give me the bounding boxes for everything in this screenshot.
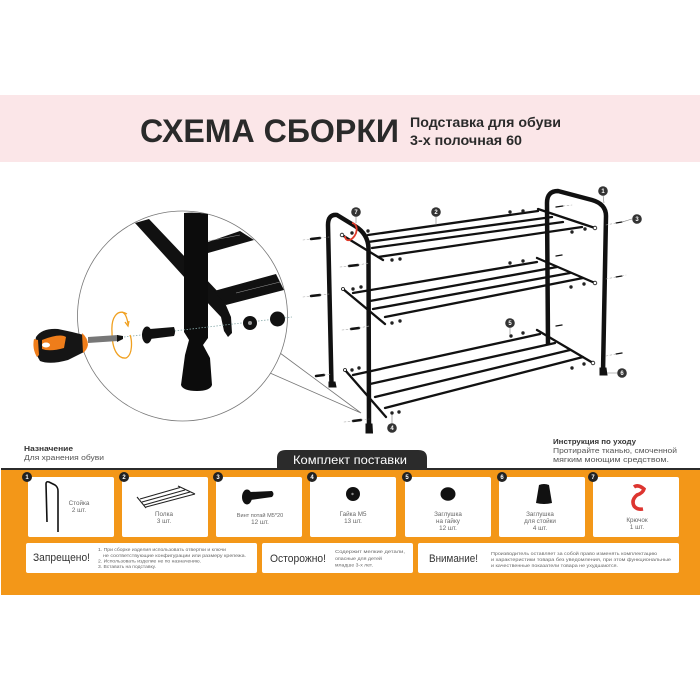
- card 6: post cap: для стойки: [524, 517, 556, 525]
- card 6: post cap: Заглушка: [526, 511, 554, 518]
- detail: cap nut: [270, 312, 285, 326]
- detail: nut: [243, 316, 257, 330]
- icon: red hook on rack: [345, 223, 357, 240]
- shoe rack assembly diagram: [303, 186, 642, 433]
- card 2: shelf: 2: [122, 475, 126, 481]
- card 3: screw: 3: [216, 475, 220, 481]
- rack number callouts: 5: [508, 321, 512, 327]
- purpose text: Назначение: [24, 446, 73, 453]
- card 4: nut: 4: [310, 475, 314, 481]
- rack number callouts: 1: [601, 189, 605, 195]
- note: attention: и характеристики товара без уведомления, при этом функциональные: [491, 557, 672, 562]
- orange kit panel: [1, 468, 700, 595]
- magnified detail callout: [33, 211, 361, 421]
- rack: rear uprights: [328, 191, 607, 433]
- title: СХЕМА СБОРКИ: [140, 113, 399, 149]
- card 4: nut: [307, 472, 396, 537]
- card 2: shelf: 3 шт.: [157, 518, 171, 525]
- card 4: nut: 13 шт.: [344, 518, 362, 525]
- card 3: screw: Винт потай М5*20: [237, 512, 283, 519]
- rack number callouts: 2: [434, 210, 438, 216]
- subtitle: 3-х полочная 60: [410, 133, 522, 148]
- note: forbidden: Запрещено!: [33, 552, 90, 564]
- rack number callouts: [351, 186, 642, 433]
- rack number callouts: 4: [390, 426, 394, 432]
- card 5: nut cap: [402, 472, 491, 537]
- rack: bottom shelf: [345, 330, 593, 417]
- card 1: upright: 2 шт.: [72, 507, 86, 514]
- rack: white bolt holes: [340, 226, 597, 372]
- rack: middle shelf: [343, 258, 595, 324]
- icon: rotation arrow: [112, 312, 131, 358]
- detail: shelf bars: [135, 219, 284, 337]
- note: caution: [262, 543, 413, 573]
- care instructions: Инструкция по уходу: [553, 437, 637, 446]
- care instructions: мягким моющим средством.: [553, 455, 669, 464]
- care instructions: Протирайте тканью, смоченной: [553, 446, 677, 455]
- rack: top shelf: [342, 209, 595, 260]
- subtitle: Подставка для обуви: [410, 115, 561, 130]
- rack number callouts: 6: [620, 371, 624, 377]
- detail: post and foot: [181, 213, 212, 391]
- card 3: screw: 12 шт.: [251, 519, 269, 526]
- note: caution: Содержит мелкие детали,: [335, 549, 405, 554]
- kit tab: [277, 450, 427, 469]
- card 2: shelf: Полка: [155, 511, 173, 518]
- card 6: post cap: 6: [500, 475, 504, 481]
- subtitle: [410, 115, 561, 148]
- rack number callouts: 7: [354, 210, 358, 216]
- rack: nuts and caps: [350, 209, 587, 415]
- rack: screws: [303, 205, 626, 422]
- note: forbidden: 1. При сборке изделия использовать отвертки и ключи: [98, 547, 226, 552]
- card 7: hook: 1 шт.: [630, 524, 644, 531]
- icon: screwdriver: [33, 329, 123, 363]
- note: attention: [418, 543, 679, 573]
- card 7: hook: 7: [591, 475, 595, 481]
- card 5: nut cap: 5: [405, 475, 409, 481]
- purpose text: Для хранения обуви: [24, 454, 104, 462]
- care instructions: [553, 437, 677, 464]
- note: caution: младше 3-х лет.: [335, 562, 373, 568]
- card 7: hook: Крючок: [626, 517, 648, 524]
- card 3: screw: [213, 472, 302, 537]
- card 1: upright: [22, 472, 114, 537]
- header band: [0, 95, 700, 162]
- card 2: shelf: [119, 472, 208, 537]
- detail: dotted assembly line: [124, 317, 292, 337]
- card 5: nut cap: 12 шт.: [439, 525, 457, 532]
- note: forbidden: [26, 543, 257, 573]
- card 7: hook: [588, 472, 679, 537]
- detail: screw: [142, 326, 175, 344]
- note: caution: Осторожно!: [270, 553, 326, 565]
- note: attention: Производитель оставляет за собой право изменять комплектацию: [491, 550, 658, 556]
- card 1: upright: 1: [25, 475, 29, 481]
- rack number callouts: 3: [635, 217, 639, 223]
- card 6: post cap: 4 шт.: [533, 525, 547, 532]
- card 6: post cap: [497, 472, 585, 537]
- card 5: nut cap: на гайку: [436, 517, 461, 525]
- note: caution: опасные для детей: [335, 555, 382, 561]
- card 5: nut cap: Заглушка: [434, 511, 462, 518]
- note: forbidden: 2. Использовать изделие не по назначению.: [98, 558, 201, 564]
- purpose text: [24, 446, 104, 462]
- card 4: nut: Гайка М5: [340, 510, 367, 518]
- note: forbidden: 3. Вставать на подставку.: [98, 564, 156, 569]
- kit tab: Комплект поставки: [293, 453, 407, 467]
- note: attention: Внимание!: [429, 553, 478, 565]
- note: forbidden: не соответствующие конфигурации или размеру крепежа.: [103, 553, 246, 558]
- note: attention: и качественные показатели товара не ухудшаются.: [491, 563, 618, 568]
- card 1: upright: Стойка: [69, 499, 90, 507]
